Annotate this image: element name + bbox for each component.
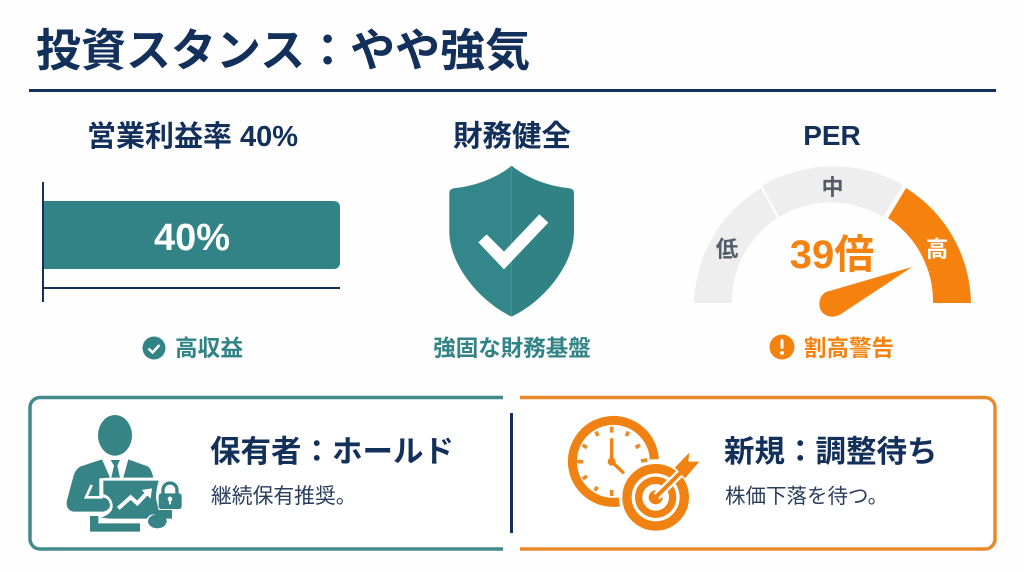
label: high profit: 高収益 (175, 335, 243, 361)
panel: operating margin (42, 120, 340, 361)
heading: PER: PER (803, 120, 861, 151)
heading: new buyers wait: 新規：調整待ち (724, 435, 938, 469)
gauge chart: 中 (821, 175, 844, 200)
gauge chart: 39倍 (790, 233, 874, 277)
icon: shield with check (449, 166, 574, 317)
label: overvalued warning: 割高警告 (804, 336, 894, 361)
label: overvalued warning (770, 334, 894, 361)
bar chart: 40% (154, 217, 230, 259)
label: high profit (142, 335, 243, 361)
gauge chart (694, 166, 971, 317)
text: continue holding: 継続保有推奨。 (211, 485, 357, 508)
divider (510, 413, 513, 533)
title: 投資スタンス：やや強気 (36, 25, 530, 76)
bar chart (42, 182, 340, 302)
icon: businessman with chart and lock (67, 415, 182, 532)
panel: financial health (433, 120, 591, 361)
heading: operating margin: 営業利益率 40% (87, 120, 298, 153)
heading: holders hold: 保有者：ホールド (210, 435, 454, 469)
icon: clock and target (572, 420, 699, 533)
panel: PER (694, 120, 971, 361)
label: strong financial base: 強固な財務基盤 (433, 336, 591, 361)
gauge chart: 低 (716, 237, 739, 262)
panel: new buyers (520, 398, 995, 549)
gauge chart: 高 (926, 237, 948, 262)
heading: financial health: 財務健全 (453, 120, 571, 153)
text: wait for price drop: 株価下落を待つ。 (725, 485, 888, 508)
panel: holders (30, 398, 503, 549)
